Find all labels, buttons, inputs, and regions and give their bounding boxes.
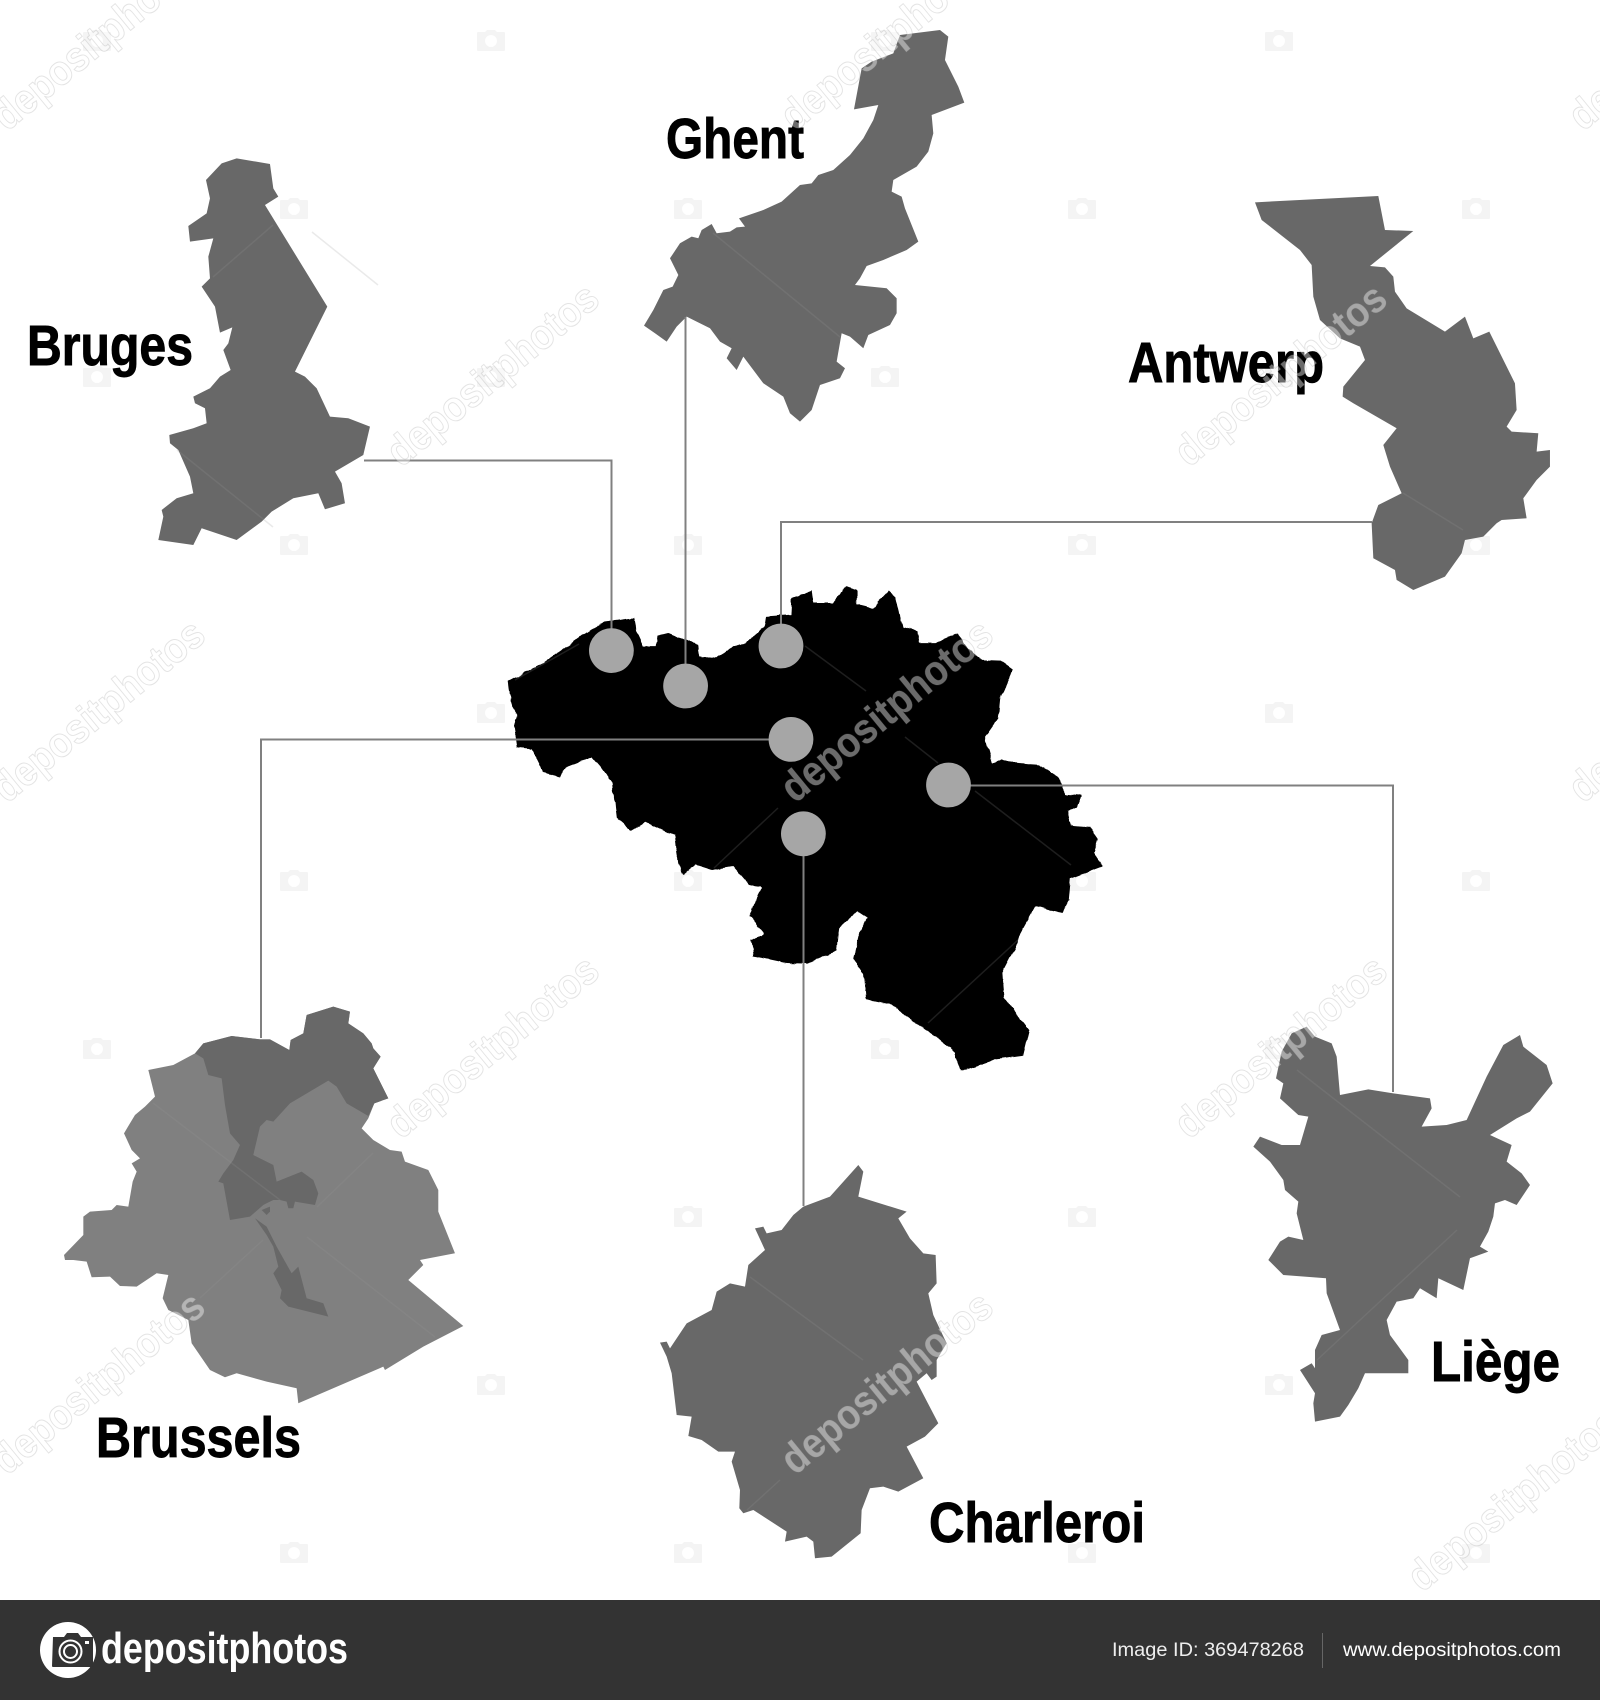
map: Antwerp — [1255, 196, 1550, 590]
map: Ghent — [644, 30, 964, 422]
label: Bruges: Bruges — [27, 314, 193, 378]
watermark diagonal streaks — [153, 225, 1463, 1510]
logo wordmark: depositphotos — [101, 1624, 348, 1673]
footer bar — [0, 1600, 1600, 1700]
watermark text tiles: depositphotos — [771, 610, 1002, 811]
map: Bruges — [158, 158, 370, 545]
footer divider — [1322, 1633, 1323, 1668]
map: Charleroi — [660, 1165, 947, 1558]
image id: Image ID: 369478268 — [1112, 1639, 1304, 1661]
label: Brussels: Brussels — [96, 1406, 301, 1470]
watermark text tiles: depositphotos — [1165, 274, 1396, 475]
watermark text tiles: depositphotos — [1165, 946, 1396, 1147]
watermark text tiles: depositphotos — [377, 274, 608, 475]
label: Antwerp: Antwerp — [1128, 331, 1324, 395]
city markers — [589, 624, 971, 856]
label: Liège: Liège — [1431, 1330, 1560, 1394]
label: Charleroi: Charleroi — [929, 1491, 1145, 1555]
website url: www.depositphotos.com — [1342, 1639, 1561, 1661]
icon: watermark cameras — [83, 30, 1490, 1563]
icon: camera logo — [40, 1622, 96, 1678]
map: Belgium silhouette — [508, 586, 1103, 1071]
watermark text tiles: depositphotos — [377, 946, 608, 1147]
map: Liège — [1253, 1027, 1553, 1422]
connector lines — [261, 317, 1393, 1206]
label: Ghent: Ghent — [666, 107, 804, 171]
map: Brussels — [64, 1007, 463, 1403]
watermark text tiles: depositphotos — [771, 1282, 1002, 1483]
